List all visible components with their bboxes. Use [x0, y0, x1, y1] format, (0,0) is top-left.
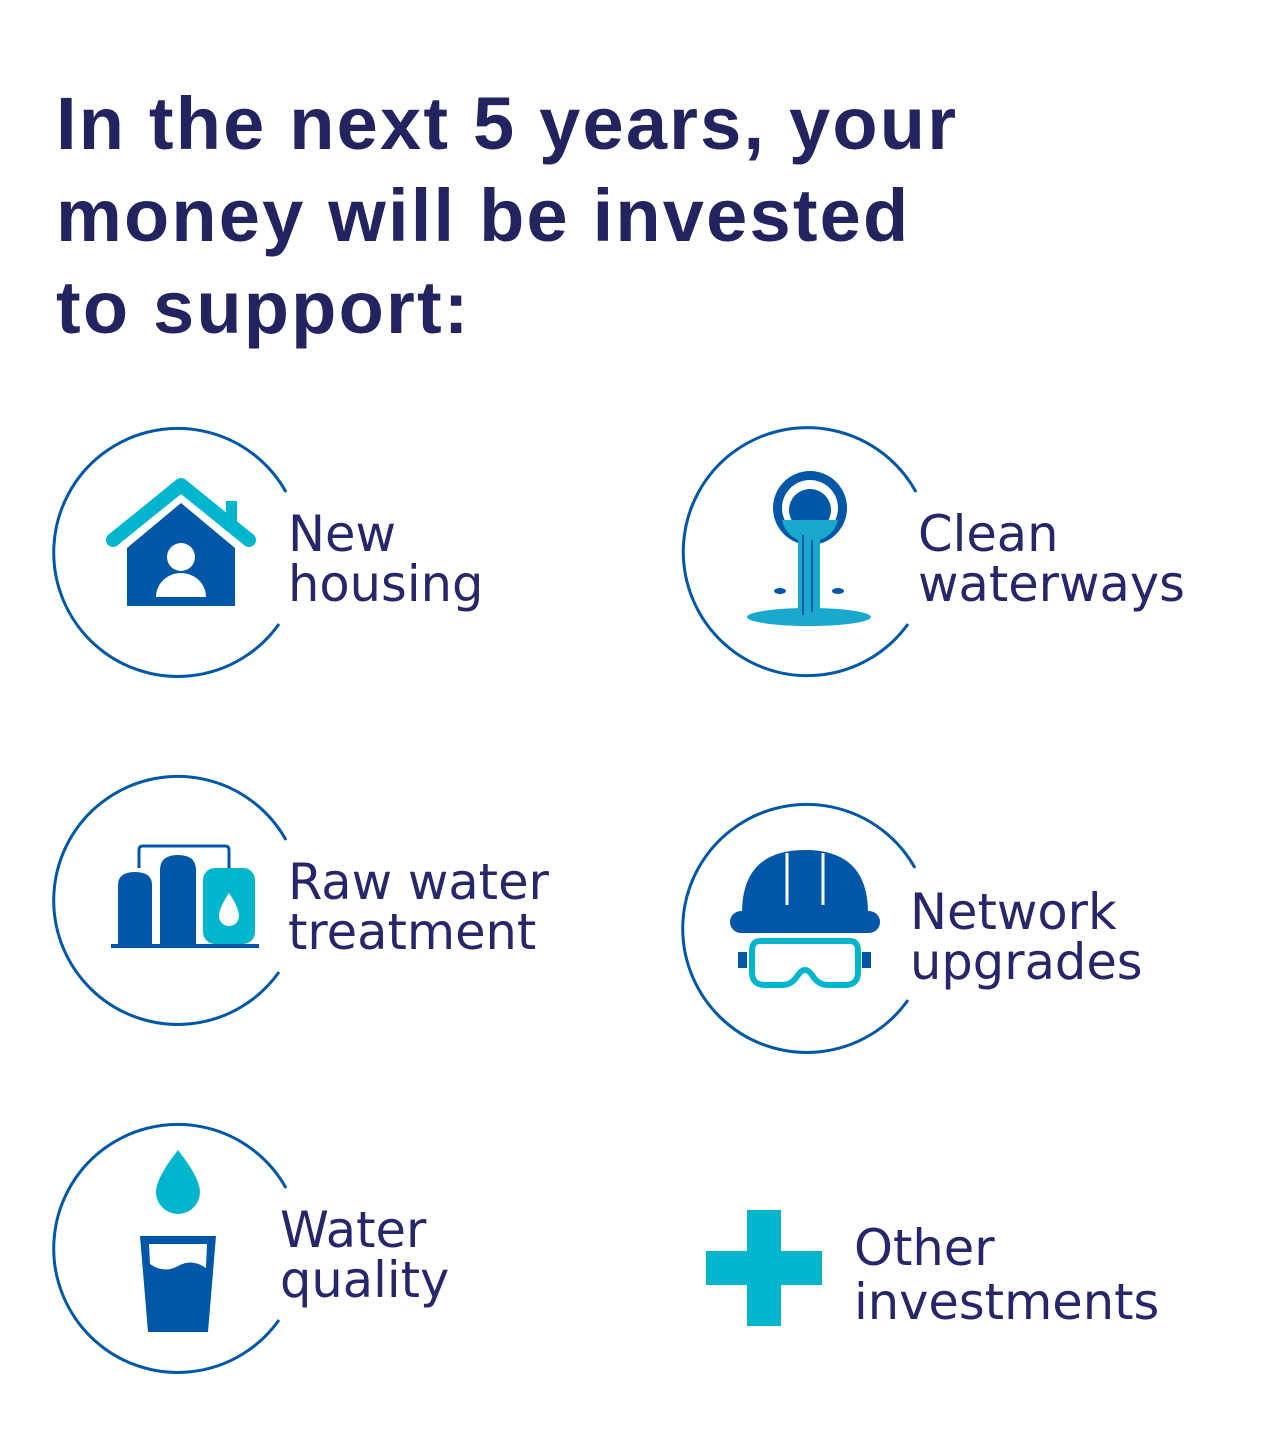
icon: hard hat and goggles — [730, 850, 880, 985]
panel: new housing — [54, 428, 483, 676]
panel: other investments — [706, 1210, 1159, 1331]
title — [56, 82, 958, 349]
label: other investments: investments — [854, 1273, 1159, 1331]
icon: house — [113, 485, 249, 606]
label: clean waterways: waterways — [918, 555, 1185, 613]
title: money will be invested — [56, 174, 910, 257]
icon: plus — [706, 1210, 822, 1326]
label: other investments: Other — [854, 1219, 995, 1277]
label: network upgrades: upgrades — [910, 933, 1143, 991]
label: clean waterways: Clean — [918, 505, 1058, 563]
icon: treatment tanks — [111, 846, 259, 948]
title: In the next 5 years, your — [56, 82, 958, 165]
panel: network upgrades — [683, 804, 1143, 1052]
icon: glass and drop — [140, 1150, 216, 1332]
label: water quality: Water — [280, 1201, 427, 1259]
label: water quality: quality — [280, 1251, 449, 1309]
title: to support: — [56, 266, 471, 349]
label: network upgrades: Network — [910, 883, 1117, 941]
panel: water quality — [54, 1124, 449, 1372]
panel: clean waterways — [683, 428, 1185, 676]
label: new housing: New — [288, 505, 396, 563]
label: raw water treatment: treatment — [288, 903, 536, 961]
panel: raw water treatment — [54, 776, 550, 1024]
icon: outfall pipe — [747, 471, 871, 626]
label: raw water treatment: Raw water — [288, 853, 550, 911]
label: new housing: housing — [288, 555, 483, 613]
